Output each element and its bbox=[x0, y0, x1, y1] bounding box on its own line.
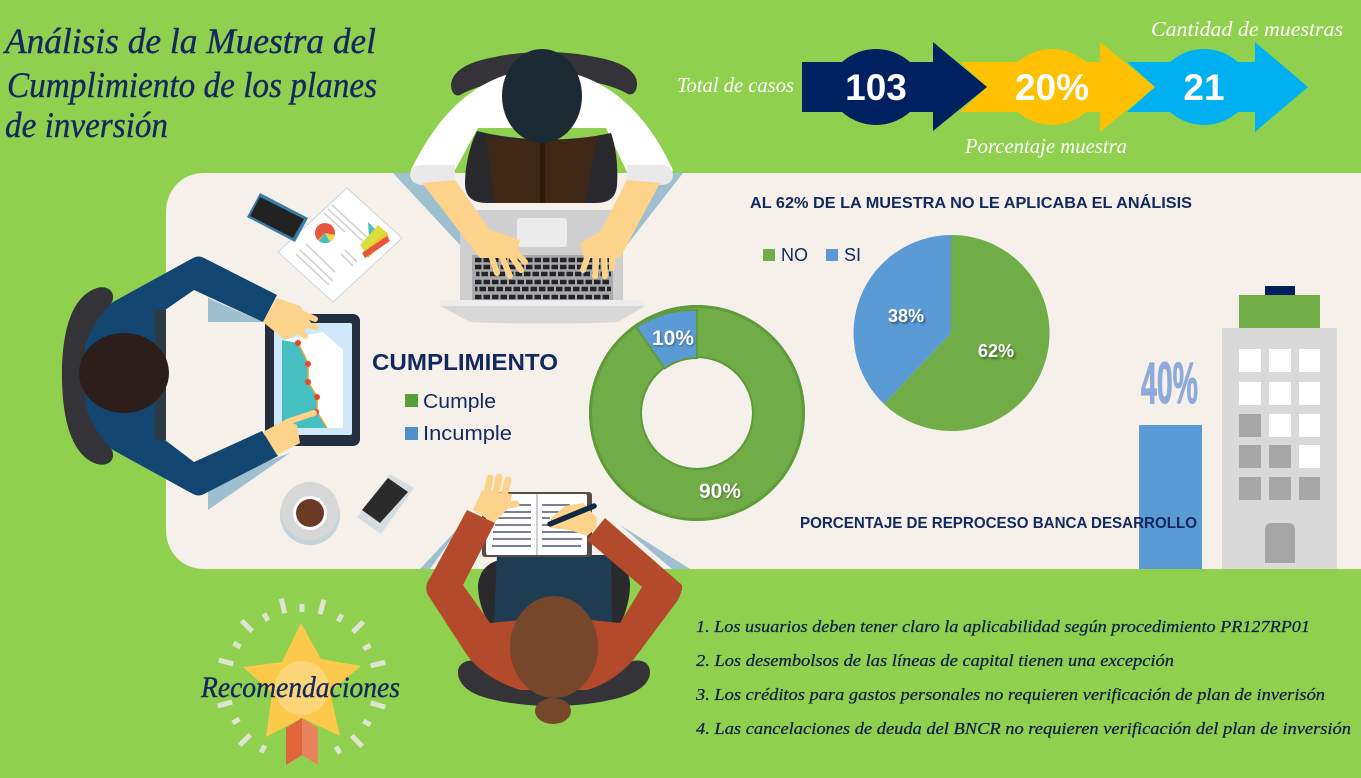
pie heading: AL 62% DE LA MUESTRA NO LE APLICABA EL ANÁLISIS bbox=[750, 193, 1192, 212]
title bbox=[3, 21, 377, 145]
cumplimiento legend: Incumple bbox=[423, 423, 512, 445]
head bbox=[510, 596, 598, 698]
vest bbox=[478, 558, 630, 624]
arrow flow bbox=[802, 42, 1308, 132]
tablet bbox=[265, 314, 360, 446]
panel: table bbox=[166, 173, 1361, 569]
arrow labels: Cantidad de muestras bbox=[1151, 17, 1343, 41]
right forearm and hand bbox=[580, 180, 660, 276]
text: 40% bbox=[1141, 351, 1198, 416]
chair bbox=[62, 287, 113, 465]
recommendations list: 4. Las cancelaciones de deuda del BNCR no requieren verificación del plan de inversión bbox=[696, 719, 1351, 738]
pie legend bbox=[763, 245, 861, 265]
reproceso label: PORCENTAJE DE REPROCESO BANCA DESARROLLO bbox=[800, 515, 1197, 532]
notebook bbox=[482, 492, 592, 557]
donut chart: 90% bbox=[699, 480, 741, 503]
person: top with laptop bbox=[393, 49, 683, 324]
chair bbox=[458, 660, 650, 706]
arrow flow: 21 bbox=[1183, 67, 1225, 108]
title: Cumplimiento de los planes bbox=[7, 65, 377, 105]
arrow labels: Total de casos bbox=[677, 73, 794, 97]
pie chart bbox=[854, 235, 1050, 431]
arrow: cyan bbox=[1127, 42, 1308, 132]
arrow: yellow bbox=[960, 42, 1155, 132]
red sweater bbox=[426, 510, 682, 690]
laptop bbox=[460, 210, 623, 305]
cumplimiento heading: CUMPLIMIENTO bbox=[372, 349, 558, 375]
icon: building bbox=[1222, 286, 1337, 569]
arrow flow: 103 bbox=[845, 67, 907, 108]
cumplimiento legend bbox=[405, 391, 512, 445]
left forearm and hand bbox=[422, 180, 525, 276]
pie legend: SI bbox=[844, 245, 861, 265]
icon: star award bbox=[217, 598, 386, 765]
head bbox=[79, 333, 169, 413]
person: bottom with notebook bbox=[420, 477, 690, 724]
recomendaciones label: Recomendaciones bbox=[200, 671, 400, 704]
chair bbox=[451, 52, 637, 95]
hands bbox=[263, 298, 316, 455]
title: Análisis de la Muestra del bbox=[3, 21, 376, 61]
donut chart bbox=[590, 306, 804, 520]
pen bbox=[550, 506, 594, 524]
recommendations list: 3. Los créditos para gastos personales no requieren verificación de plan de inverisón bbox=[695, 685, 1325, 704]
recommendations list bbox=[695, 617, 1351, 738]
bar: 40% bbox=[1139, 425, 1202, 569]
title: de inversión bbox=[5, 105, 168, 145]
desk items: coffee bbox=[280, 482, 340, 545]
shirt bbox=[411, 68, 673, 176]
arrow labels: Porcentaje muestra bbox=[964, 134, 1127, 158]
suit bbox=[85, 256, 278, 496]
vest bbox=[465, 131, 617, 203]
donut chart: 10% bbox=[652, 327, 694, 350]
left hand bbox=[473, 477, 516, 523]
pie chart: 38% bbox=[888, 306, 924, 326]
pie legend: NO bbox=[781, 245, 808, 265]
person: left with tablet bbox=[62, 256, 360, 510]
arrow flow: 20% bbox=[1015, 67, 1089, 108]
arrow: navy bbox=[802, 42, 987, 131]
recommendations list: 2. Los desembolsos de las líneas de capital tienen una excepción bbox=[696, 651, 1174, 670]
desk items: phone and report bbox=[247, 188, 402, 302]
desk items: phone bbox=[357, 474, 414, 534]
head bbox=[502, 49, 582, 143]
arrow labels bbox=[677, 17, 1343, 158]
recommendations list: 1. Los usuarios deben tener claro la aplicabilidad según procedimiento PR127RP01 bbox=[696, 617, 1310, 636]
cumplimiento legend: Cumple bbox=[423, 391, 496, 413]
right hand bbox=[550, 503, 597, 536]
pie chart: 62% bbox=[978, 341, 1014, 361]
